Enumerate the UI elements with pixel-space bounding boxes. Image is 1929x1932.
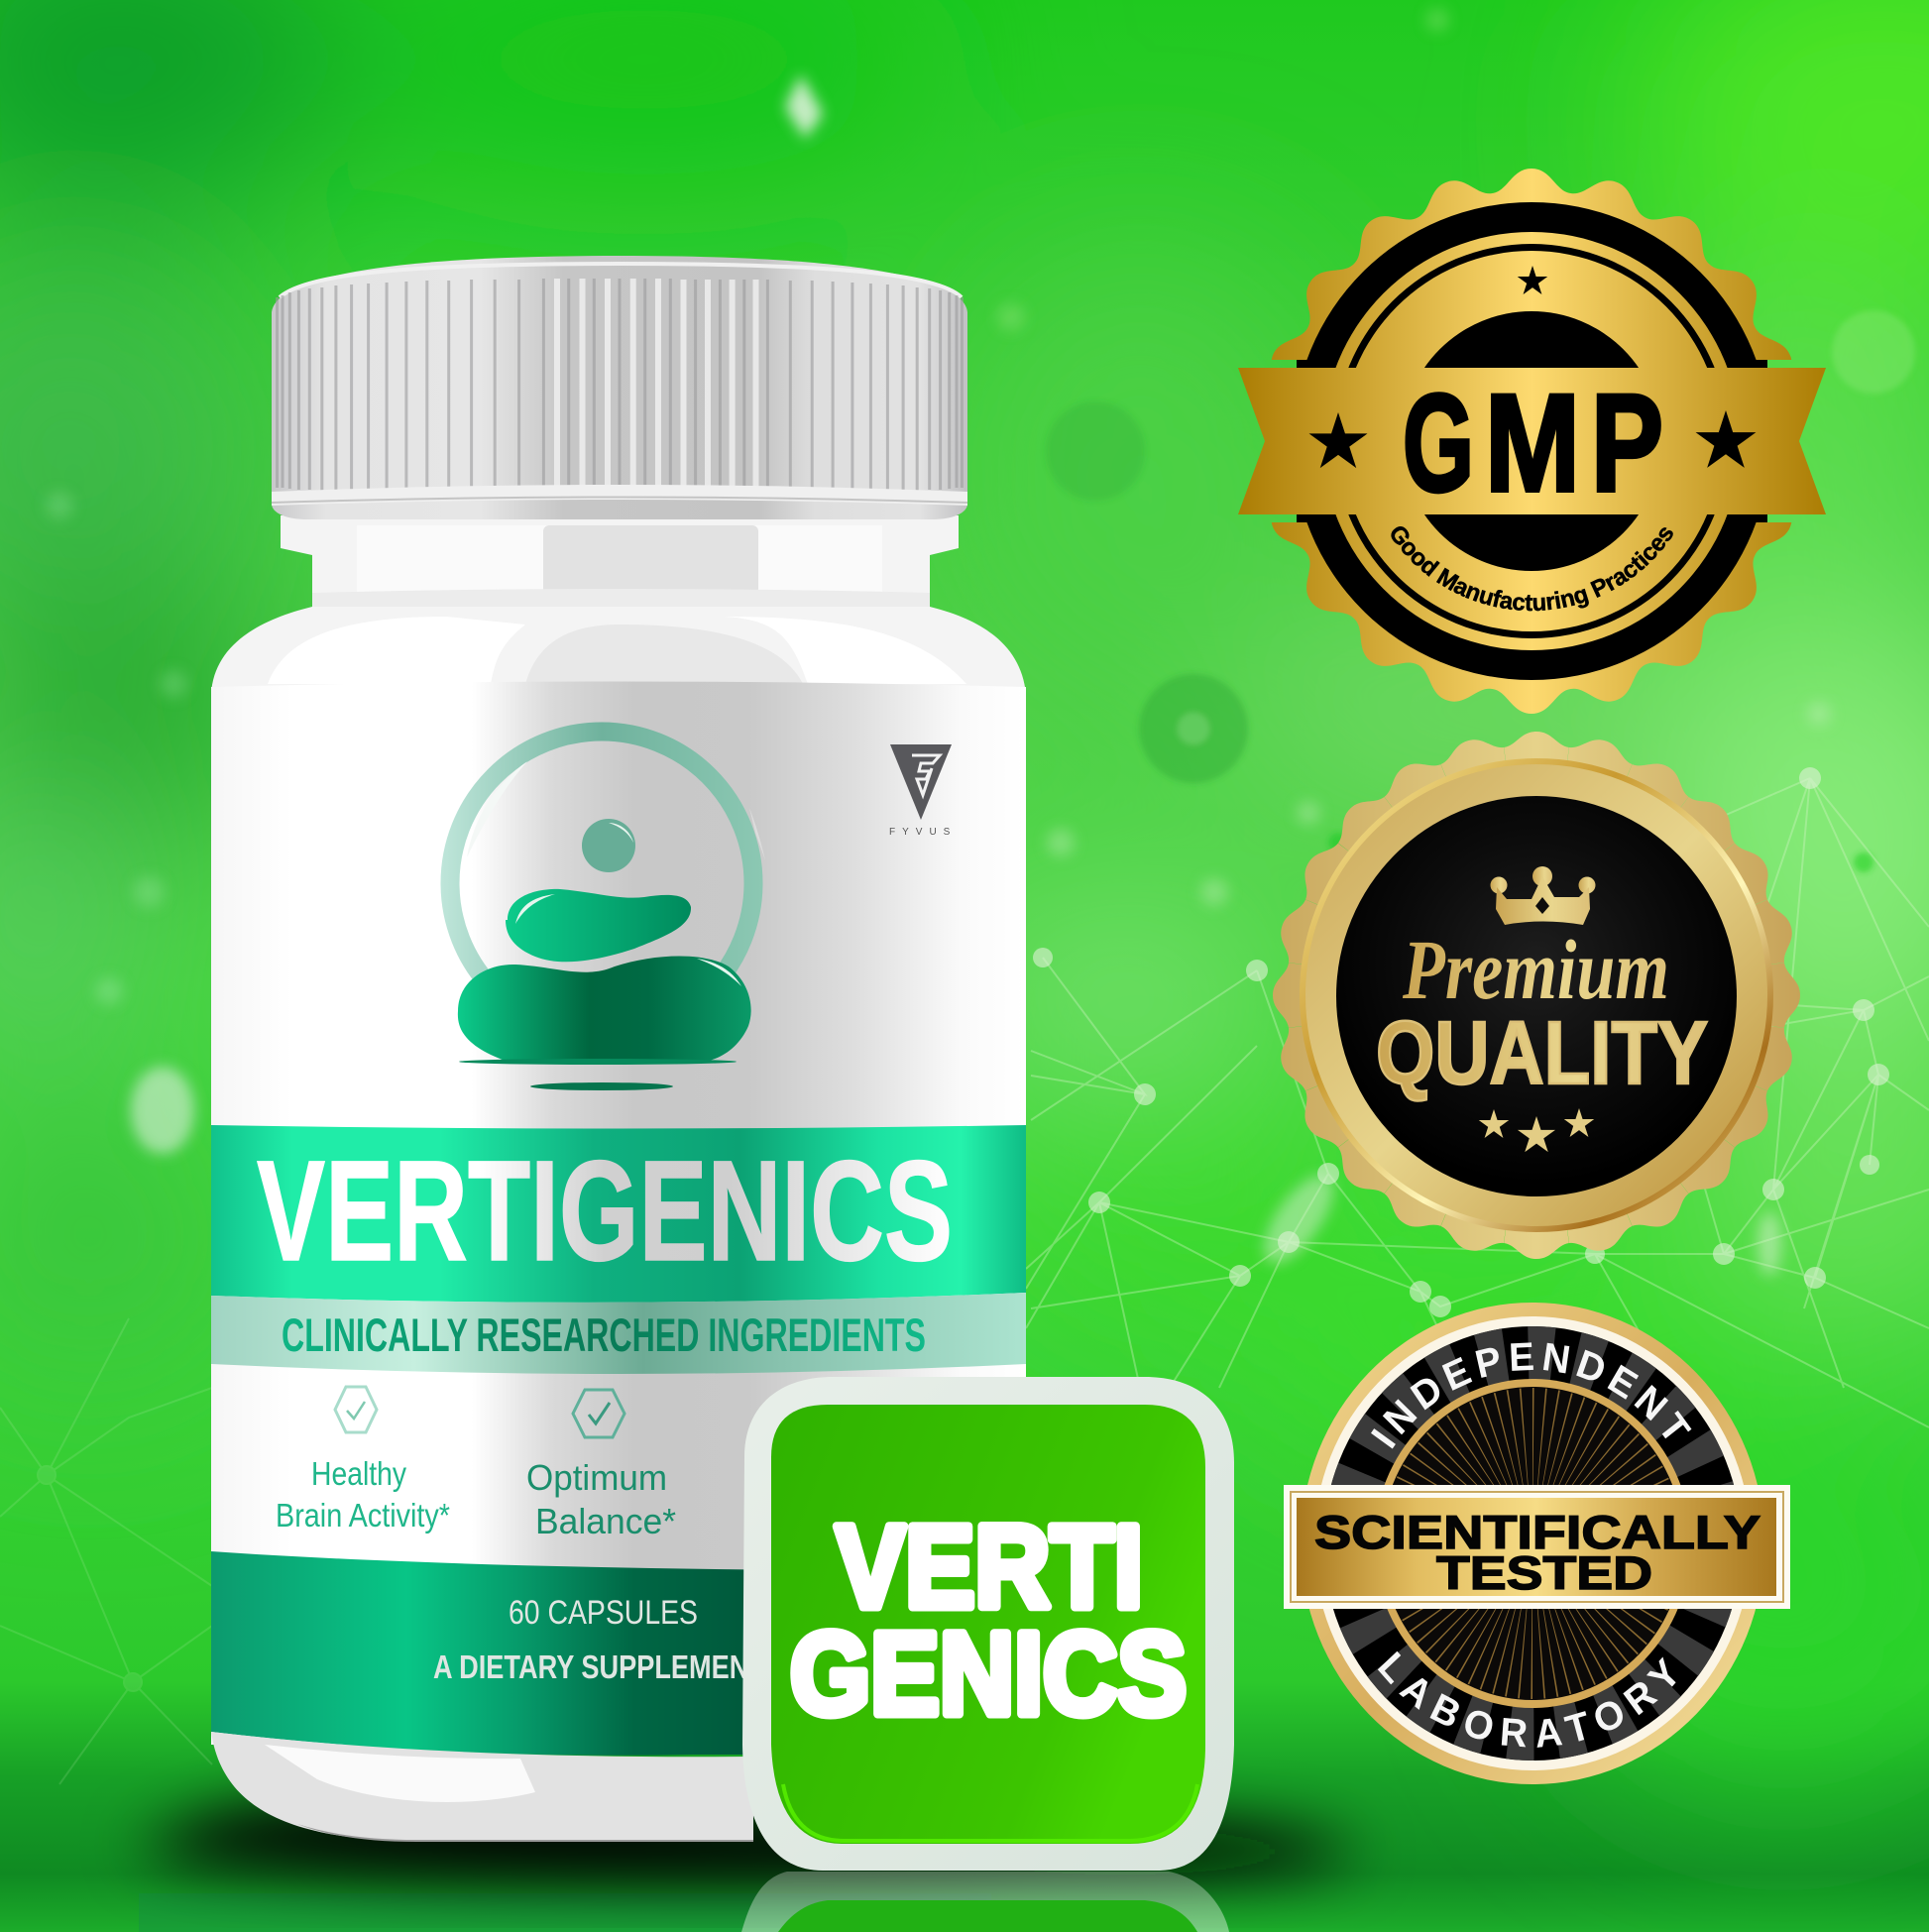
badge: scientifically tested bbox=[1284, 1303, 1790, 1784]
tile rim bbox=[742, 1377, 1234, 1871]
curved caption: Good Manufacturing Practices bbox=[1391, 526, 1673, 611]
clinically researched ingredients: CLINICALLY RESEARCHED INGREDIENTS bbox=[282, 1308, 926, 1361]
benefit: optimum balance: Optimum bbox=[526, 1457, 667, 1498]
ground lines bbox=[459, 1059, 737, 1065]
FYVUS brand mark bbox=[889, 744, 957, 838]
benefit: healthy brain activity: Healthy bbox=[311, 1455, 406, 1492]
bottle neck and shoulders bbox=[211, 515, 1026, 1745]
pale band bbox=[211, 1293, 1026, 1374]
FYVUS brand mark: FYVUS bbox=[889, 827, 957, 838]
benefit: healthy brain activity bbox=[276, 1387, 450, 1534]
bottle cap bbox=[272, 256, 967, 519]
arc text: INDEPENDENT bbox=[1371, 1342, 1691, 1449]
VERTI GENICS tile text: GENICS bbox=[790, 1609, 1187, 1740]
top star bbox=[1518, 266, 1547, 294]
network lines, right side bbox=[1026, 767, 1929, 1427]
three stars bbox=[1479, 1108, 1594, 1152]
icon: hexagon check bbox=[335, 1387, 377, 1432]
VERTI GENICS tile text bbox=[790, 1502, 1187, 1740]
VERTI GENICS tile text: VERTI bbox=[836, 1502, 1143, 1633]
bottle bbox=[211, 256, 1026, 1842]
round seal bbox=[1307, 1303, 1758, 1784]
capsule count: 60 CAPSULES bbox=[509, 1594, 698, 1632]
badge: premium quality bbox=[1259, 718, 1814, 1273]
bokeh and blurred particles bbox=[46, 8, 1915, 1276]
floor band bbox=[139, 1893, 991, 1932]
VERTIGENICS product name: VERTIGENICS bbox=[257, 1131, 953, 1291]
round seal: LABORATORY bbox=[1378, 1651, 1675, 1748]
GMP text: P bbox=[1591, 365, 1663, 520]
scalloped gold seal bbox=[1254, 164, 1809, 719]
product logo: capsules in circle bbox=[450, 732, 765, 1090]
tile face bbox=[771, 1405, 1205, 1844]
concentric rings bbox=[1293, 202, 1770, 680]
ribbon bbox=[1284, 1485, 1790, 1609]
ribbon bbox=[1238, 368, 1826, 514]
GMP text: G bbox=[1403, 365, 1474, 520]
Premium script: Premium bbox=[1402, 922, 1669, 1017]
network lines, left side bbox=[0, 1318, 212, 1784]
QUALITY: QUALITY bbox=[1376, 1004, 1708, 1103]
bottle label bbox=[211, 682, 1026, 1842]
green band bbox=[211, 1125, 1026, 1303]
ribbon text: SCIENTIFICALLY bbox=[1314, 1506, 1760, 1558]
icon: hexagon check bbox=[573, 1390, 624, 1437]
upper capsule bbox=[506, 889, 691, 962]
lower capsule bbox=[458, 956, 751, 1063]
reflection of brand tile bbox=[741, 1872, 1229, 1932]
small ball bbox=[582, 819, 635, 872]
metal ring bbox=[1303, 761, 1770, 1229]
floor shadow bbox=[139, 1794, 1358, 1883]
lower dark band bbox=[211, 1551, 1026, 1756]
bottle base bbox=[211, 1732, 753, 1841]
badge: scientifically tested: TESTED bbox=[1436, 1546, 1652, 1599]
scalloped seal bbox=[1259, 718, 1814, 1273]
benefit: optimum balance: Balance* bbox=[535, 1501, 676, 1541]
GMP text: M bbox=[1485, 365, 1580, 520]
benefit: healthy brain activity: Brain Activity* bbox=[276, 1497, 450, 1534]
brand tile bbox=[742, 1377, 1234, 1871]
ribbon stars bbox=[1309, 412, 1367, 468]
badge: GMP bbox=[1238, 169, 1826, 714]
icon: crown bbox=[1491, 866, 1596, 925]
dietary supplement: A DIETARY SUPPLEMENT bbox=[433, 1648, 765, 1685]
benefit: optimum balance bbox=[526, 1390, 676, 1541]
black disc bbox=[1336, 796, 1737, 1196]
